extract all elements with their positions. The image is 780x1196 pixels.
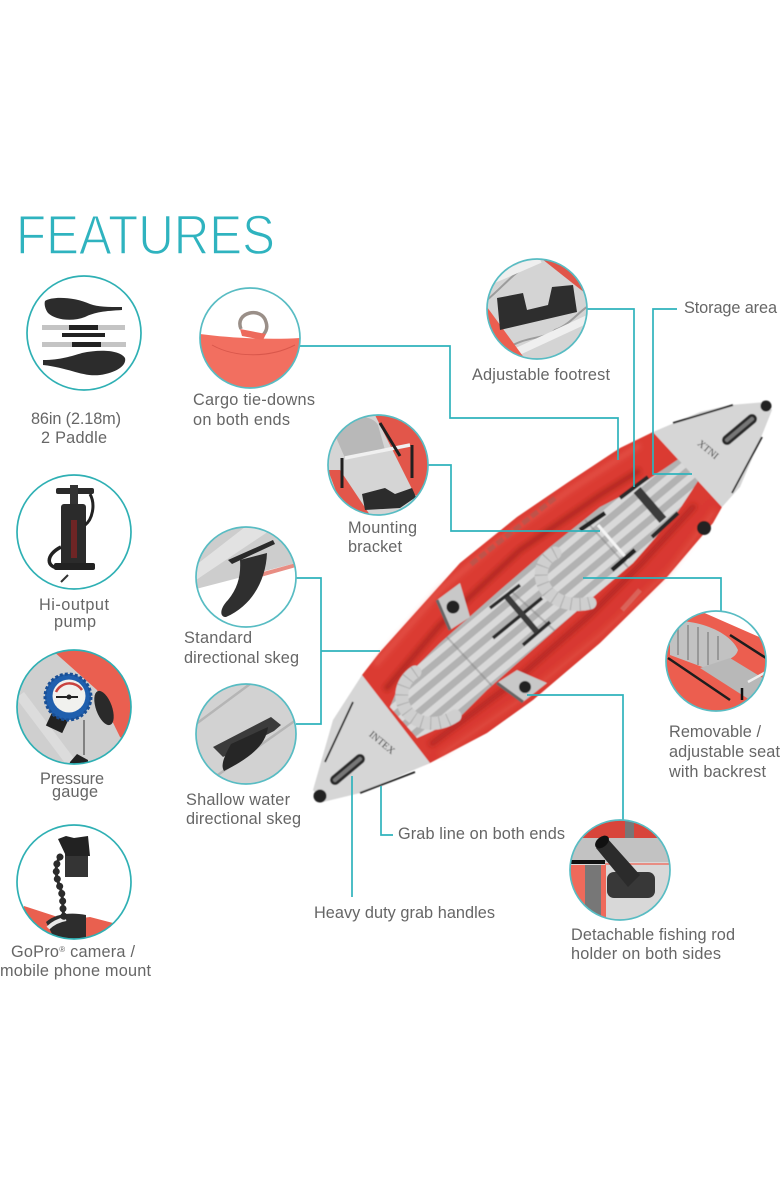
label: mount: GoPro [11, 943, 59, 961]
front footrest [620, 477, 678, 537]
label: seat: Removable / [669, 723, 761, 741]
leader: storage area [653, 309, 692, 474]
leader: adjustable footrest [587, 309, 634, 487]
icon: footrest [487, 259, 590, 359]
label: cargo line two: on both ends [193, 411, 290, 429]
front seat [541, 553, 590, 605]
label: standard skeg: Standard [184, 629, 252, 647]
label: storage: Storage area [684, 299, 778, 317]
label: cargo: Cargo tie-downs [193, 391, 315, 409]
kayak floor [389, 459, 698, 739]
label: grab line: Grab line on both ends [398, 825, 565, 843]
leader: grab line [381, 786, 393, 835]
icon: mounting bracket [328, 415, 428, 515]
mounting bracket bar [598, 525, 628, 560]
front nose [653, 402, 772, 507]
kayak illustration [313, 400, 772, 802]
leader: seat [583, 578, 721, 611]
rear footrest [490, 585, 550, 645]
leader: cargo tie-downs [300, 346, 618, 460]
icon: phone mount [17, 825, 131, 945]
label: footrest: Adjustable footrest [472, 366, 610, 384]
icon: seat [666, 611, 766, 711]
rear nose [313, 675, 430, 802]
rear seat [402, 672, 455, 723]
label: paddle: 86in (2.18m) [31, 410, 121, 428]
label: standard skeg line two: directional skeg [184, 649, 299, 667]
kayak tube shading [375, 445, 715, 755]
icon: paddle [27, 276, 141, 390]
icon: pump [17, 475, 131, 589]
leader: skegs [296, 578, 380, 724]
kayak brand lettering on tube [470, 498, 555, 565]
label: gauge line two: gauge [52, 783, 98, 801]
label: seat line two: adjustable seat [669, 743, 780, 761]
label: bracket line two: bracket [348, 538, 402, 556]
leader: grab handles [351, 776, 353, 897]
icon: shallow skeg [196, 684, 296, 784]
label: grab handles: Heavy duty grab handles [314, 904, 495, 922]
label: rod holder: Detachable fishing rod [571, 926, 735, 944]
icon: cargo tie-down [200, 288, 300, 390]
nose tips [760, 400, 772, 412]
label: mount line two: mobile phone mount [0, 962, 151, 980]
kayak illustration: INTEX [367, 729, 397, 757]
leader: rod holder [527, 695, 623, 820]
label: bracket: Mounting [348, 519, 417, 537]
leader: mounting bracket [428, 465, 600, 531]
label: pump: Hi-output [39, 596, 109, 614]
label: pump line two: pump [54, 613, 96, 631]
fishing rod patches [437, 583, 470, 630]
icon: standard skeg [196, 527, 296, 627]
icon: rod holder [570, 820, 670, 920]
title: FEATURES [16, 203, 275, 266]
label: mount: camera / [65, 943, 135, 961]
label: gauge: Pressure [40, 770, 104, 788]
icon: pressure gauge [17, 650, 131, 770]
label: shallow skeg line two: directional skeg [186, 810, 301, 828]
rear grab handle and lines [335, 759, 360, 780]
label: paddle count: 2 Paddle [41, 429, 107, 447]
label: shallow skeg: Shallow water [186, 791, 291, 809]
label: mount: ® [59, 945, 65, 954]
kayak brand marks: XTNI [695, 438, 720, 462]
label: seat line three: with backrest [668, 763, 766, 781]
leader lines [296, 309, 721, 897]
label: rod holder line two: holder on both sides [571, 945, 721, 963]
kayak red hull [345, 432, 722, 775]
front grab handle and lines [727, 419, 752, 440]
